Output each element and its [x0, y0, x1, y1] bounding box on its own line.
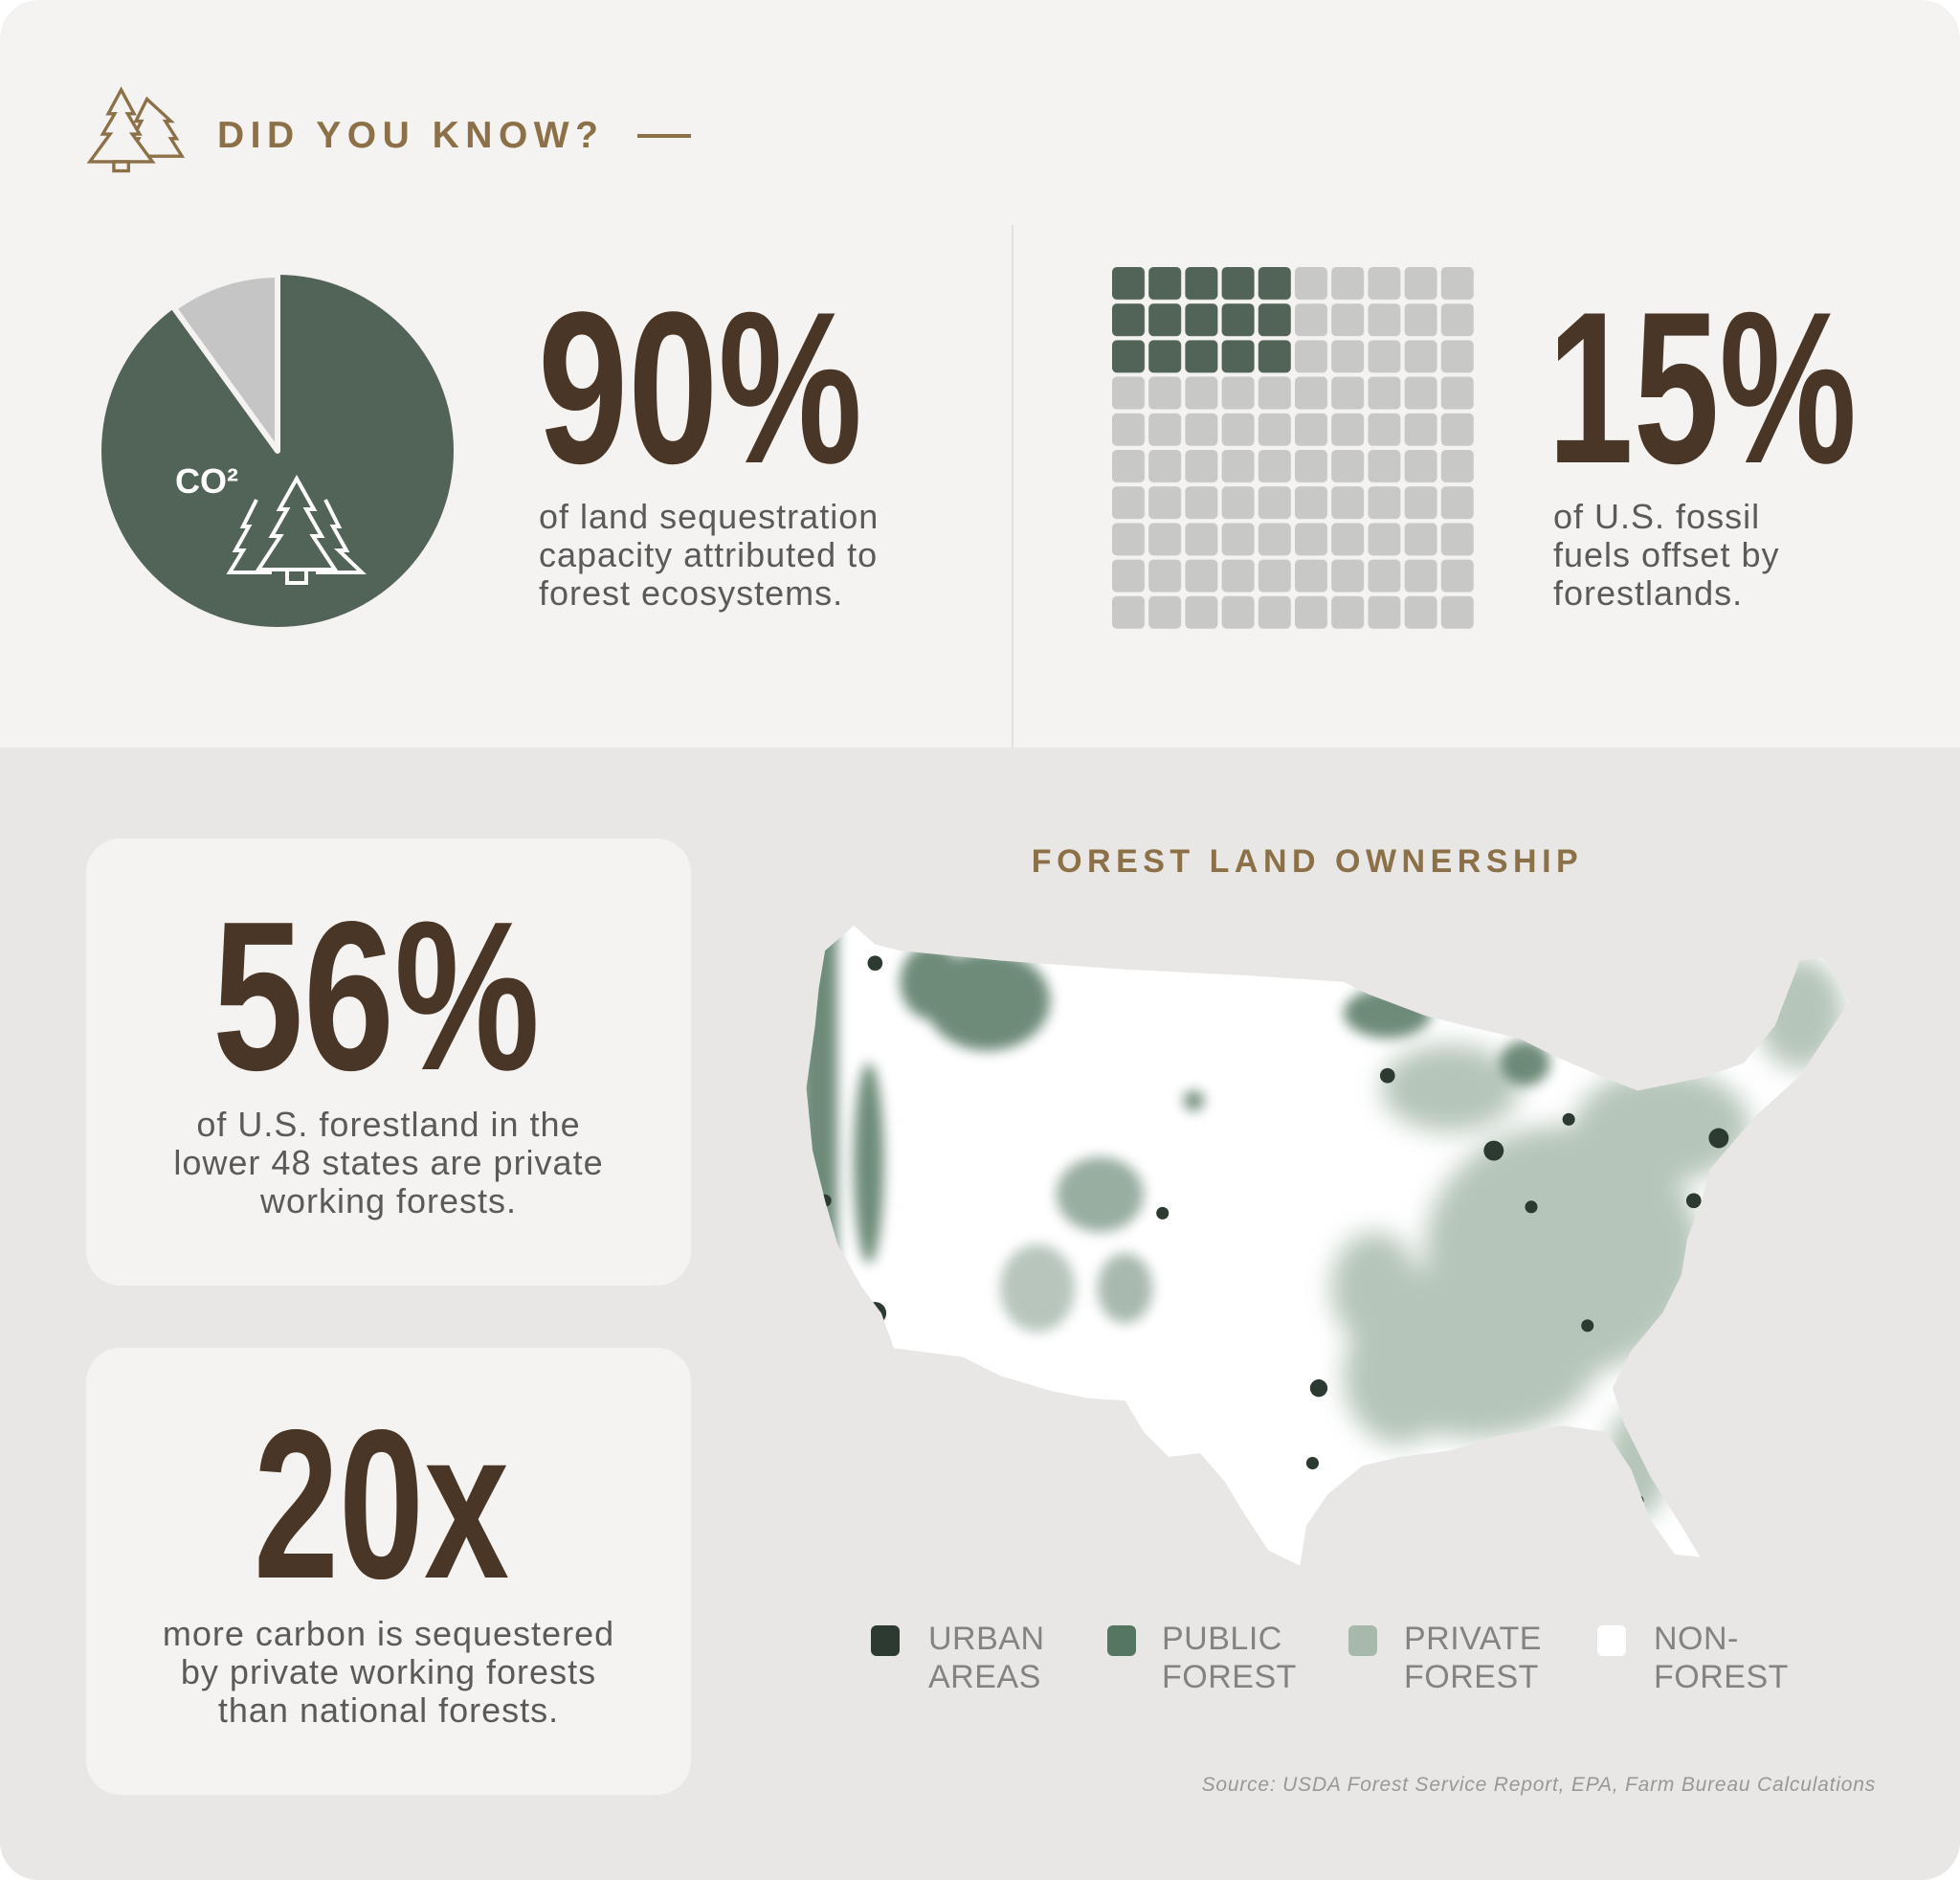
legend item: private: FOREST	[1404, 1659, 1539, 1695]
heading: did you know: DID YOU KNOW?	[217, 115, 604, 156]
legend item: public: PUBLIC	[1162, 1621, 1282, 1657]
source note: Source: USDA Forest Service Report, EPA, Farm Bureau Calculations	[1202, 1774, 1876, 1796]
legend item: urban	[871, 1621, 1045, 1695]
pie chart	[101, 275, 454, 627]
panel: card 20x	[86, 1348, 691, 1795]
heading: forest land ownership: FOREST LAND OWNERSHIP	[1032, 843, 1583, 880]
bottom section background	[0, 748, 1960, 1880]
vertical divider	[1012, 225, 1013, 748]
top section background	[0, 0, 1960, 748]
legend item: non-forest: NON-	[1654, 1621, 1739, 1657]
text: 20x description: than national forests.	[218, 1690, 559, 1730]
text: 20x description	[163, 1614, 614, 1730]
map: US forest ownership	[806, 926, 1849, 1566]
text: 20x description: by private working forests	[181, 1652, 596, 1691]
text: 56% description	[173, 1105, 604, 1220]
legend item: non-forest	[1597, 1621, 1789, 1695]
text: 20x description: more carbon is sequestered	[163, 1614, 614, 1653]
chart: waffle 15%	[1112, 267, 1474, 629]
public forest west	[800, 926, 1550, 1376]
legend	[871, 1621, 1789, 1695]
text: 15% description: of U.S. fossil	[1553, 497, 1760, 536]
legend item: private	[1348, 1621, 1542, 1695]
legend item: public: FOREST	[1162, 1659, 1297, 1695]
legend item: urban: AREAS	[928, 1659, 1041, 1695]
legend item: private: PRIVATE	[1404, 1621, 1542, 1657]
text: 56% description: working forests.	[260, 1181, 517, 1220]
text: 90% description: of land sequestration	[539, 497, 879, 536]
dash accent	[637, 134, 691, 138]
text: 15% description: forestlands.	[1553, 573, 1743, 613]
text: 56% description: of U.S. forestland in the	[196, 1105, 581, 1144]
text: 15% description	[1553, 497, 1779, 613]
urban areas	[819, 955, 1809, 1507]
icon: trees header	[86, 86, 186, 172]
text: 90% description: forest ecosystems.	[539, 573, 843, 613]
legend item: non-forest: FOREST	[1654, 1659, 1789, 1695]
legend item: public	[1107, 1621, 1297, 1695]
panel: card 56%	[86, 839, 691, 1286]
private forest east	[1331, 957, 1843, 1519]
panel: pie chart 90%	[101, 275, 454, 627]
pie chart: CO²	[175, 461, 238, 501]
text: 15% description: fuels offset by	[1553, 535, 1779, 574]
text: 90% description: capacity attributed to	[539, 535, 878, 574]
text: 90% description	[539, 497, 879, 613]
legend item: urban: URBAN	[928, 1621, 1045, 1657]
text: 56% description: lower 48 states are private	[173, 1143, 604, 1182]
